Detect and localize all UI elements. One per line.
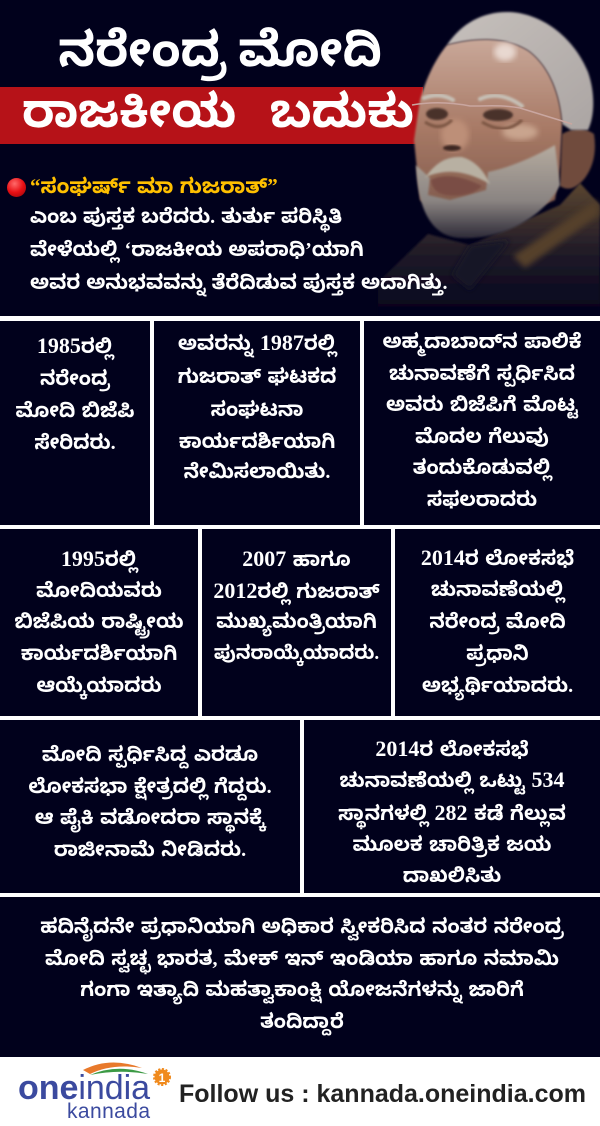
panel: won both constituencies: ರಾಜೀನಾಮೆ ನೀಡಿದರು. xyxy=(54,839,246,861)
icon: red bullet xyxy=(7,178,26,197)
panel: 1985 joined BJP: ಸೇರಿದರು. xyxy=(34,432,116,454)
footer xyxy=(0,1057,600,1126)
panel: Ahmedabad municipal election: ಮೊದಲ ಗೆಲುವು xyxy=(415,426,549,448)
panel: 1995 national secretary: ಆಯ್ಕೆಯಾದರು xyxy=(36,675,162,697)
panel: won both constituencies: ಲೋಕಸಭಾ ಕ್ಷೇತ್ರದಲ್ಲಿ ಗೆದ್ದರು. xyxy=(28,776,272,798)
panel: 1987 organisation secretary: ಅವರನ್ನು 1987ರಲ್ಲಿ xyxy=(178,330,336,355)
panel: 282 of 534 seats: ಚುನಾವಣೆಯಲ್ಲಿ ಒಟ್ಟು 534 xyxy=(340,767,564,792)
oneindia kannada logo: oneindia xyxy=(18,1069,150,1107)
panel: 282 of 534 seats: ದಾಖಲಿಸಿತು xyxy=(403,865,501,887)
oneindia kannada logo xyxy=(18,1062,171,1123)
panel: 1985 joined BJP: ಮೋದಿ ಬಿಜೆಪಿ xyxy=(16,400,134,422)
panel: Ahmedabad municipal election: ತಂದುಕೊಡುವಲ್ಲಿ xyxy=(413,457,551,479)
glasses xyxy=(412,103,572,124)
panel: 1995 national secretary xyxy=(0,529,198,716)
panel: 1987 organisation secretary: ಸಂಘಟನಾ xyxy=(211,399,303,421)
panel: 1985 joined BJP: ನರೇಂದ್ರ xyxy=(40,368,110,390)
eyes xyxy=(426,108,448,120)
highlighted book title: “ಸಂಘರ್ಷ್ ಮಾ ಗುಜರಾತ್” xyxy=(30,174,278,198)
oneindia kannada logo: kannada xyxy=(67,1100,150,1123)
face xyxy=(414,40,562,236)
follow us text: Follow us : kannada.oneindia.com xyxy=(179,1080,586,1108)
panel: 1985 joined BJP: 1985ರಲ್ಲಿ xyxy=(37,333,113,358)
panel: 1987 organisation secretary: ನೇಮಿಸಲಾಯಿತು. xyxy=(184,461,330,483)
panel: Ahmedabad municipal election: ಸಫಲರಾದರು xyxy=(427,489,537,511)
lips xyxy=(431,176,482,196)
panel: 2014 PM candidate: ಪ್ರಧಾನಿ xyxy=(466,643,529,665)
intro text: ಎಂಬ ಪುಸ್ತಕ ಬರೆದರು. ತುರ್ತು ಪರಿಸ್ಥಿತಿ xyxy=(30,206,342,228)
intro text xyxy=(30,206,448,296)
portrait photo illustration xyxy=(378,10,600,306)
intro text: ಅವರ ಅನುಭವವನ್ನು ತೆರೆದಿಡುವ ಪುಸ್ತಕ ಅದಾಗಿತ್ತು. xyxy=(30,272,448,294)
panel: 2007 and 2012 chief minister xyxy=(202,529,391,716)
panel: 2007 and 2012 chief minister: ಪುನರಾಯ್ಕೆಯಾದರು. xyxy=(214,643,379,664)
panel: 2014 PM candidate: ನರೇಂದ್ರ ಮೋದಿ xyxy=(429,611,566,633)
panel: 1995 national secretary: ಕಾರ್ಯದರ್ಶಿಯಾಗಿ xyxy=(21,643,177,665)
eyebrows xyxy=(424,95,522,106)
red title band: ರಾಜಕೀಯ ಬದುಕು xyxy=(22,86,414,138)
panel: 282 of 534 seats: ಸ್ಥಾನಗಳಲ್ಲಿ 282 ಕಡೆ ಗೆಲ್ಲುವ xyxy=(338,800,566,825)
panel: won both constituencies: ಮೋದಿ ಸ್ಪರ್ಧಿಸಿದ್ದ ಎರಡೂ xyxy=(42,744,258,766)
panel: 1985 joined BJP xyxy=(0,321,150,525)
nose xyxy=(441,119,469,151)
beard xyxy=(416,145,560,238)
ear xyxy=(560,129,595,189)
panel: 282 of 534 seats: ಮೂಲಕ ಚಾರಿತ್ರಿಕ ಜಯ xyxy=(353,834,551,856)
shawl and shoulders xyxy=(378,183,600,316)
panel: schemes as prime minister: ಗಂಗಾ ಇತ್ಯಾದಿ ಮಹತ್ವಾಕಾಂಕ್ಷಿ ಯೋಜನೆಗಳನ್ನು ಜಾರಿಗೆ xyxy=(80,979,524,1001)
oneindia kannada logo: 1 xyxy=(159,1071,166,1085)
panel: won both constituencies: ಆ ಪೈಕಿ ವಡೋದರಾ ಸ್ಥಾನಕ್ಕೆ xyxy=(35,807,265,829)
panel: Ahmedabad municipal election: ಅವರು ಬಿಜೆಪಿಗೆ ಮೊಟ್ಟ xyxy=(386,394,578,416)
panel: 2007 and 2012 chief minister: ಮುಖ್ಯಮಂತ್ರಿಯಾಗಿ xyxy=(216,611,377,633)
panel: 2014 PM candidate xyxy=(395,529,600,716)
panel: 2014 PM candidate: ಅಭ್ಯರ್ಥಿಯಾದರು. xyxy=(422,675,573,697)
panel: 1987 organisation secretary: ಕಾರ್ಯದರ್ಶಿಯಾಗಿ xyxy=(179,431,335,453)
panel: 2007 and 2012 chief minister: 2012ರಲ್ಲಿ ಗುಜರಾತ್ xyxy=(213,578,380,603)
panel: schemes as prime minister: ಹದಿನೈದನೇ ಪ್ರಧಾನಿಯಾಗಿ ಅಧಿಕಾರ ಸ್ವೀಕರಿಸಿದ ನಂತರ ನರೇಂದ್ರ xyxy=(40,916,564,938)
panel: schemes as prime minister: ತಂದಿದ್ದಾರೆ xyxy=(260,1011,344,1033)
panel: 2014 PM candidate: ಚುನಾವಣೆಯಲ್ಲಿ xyxy=(431,579,564,601)
panel: 1987 organisation secretary: ಗುಜರಾತ್ ಘಟಕದ xyxy=(178,366,336,388)
panel: 2014 PM candidate: 2014ರ ಲೋಕಸಭೆ xyxy=(421,545,574,570)
panel: 2007 and 2012 chief minister: 2007 ಹಾಗೂ xyxy=(242,546,351,571)
panel: header xyxy=(0,0,600,316)
panel: Ahmedabad municipal election xyxy=(364,321,600,525)
title: ನರೇಂದ್ರ ಮೋದಿ xyxy=(58,24,382,77)
hair xyxy=(447,12,593,130)
panel: schemes as prime minister: ಮೋದಿ ಸ್ವಚ್ಛ ಭಾರತ, ಮೇಕ್ ಇನ್ ಇಂಡಿಯಾ ಹಾಗೂ ನಮಾಮಿ xyxy=(45,948,559,970)
panel: 1995 national secretary: ಬಿಜೆಪಿಯ ರಾಷ್ಟ್ರೀಯ xyxy=(14,611,184,633)
panel: 1995 national secretary: 1995ರಲ್ಲಿ xyxy=(61,546,137,571)
intro text: ವೇಳೆಯಲ್ಲಿ ‘ರಾಜಕೀಯ ಅಪರಾಧಿ’ಯಾಗಿ xyxy=(30,239,364,261)
panel: 1987 organisation secretary xyxy=(154,321,360,525)
panel: Ahmedabad municipal election: ಅಹ್ಮದಾಬಾದ್‌ನ ಪಾಲಿಕೆ xyxy=(382,331,582,353)
panel: won both constituencies xyxy=(0,720,300,893)
panel: 1995 national secretary: ಮೋದಿಯವರು xyxy=(36,580,162,602)
panel: 282 of 534 seats xyxy=(304,720,600,893)
panel: schemes as prime minister xyxy=(0,897,600,1057)
panel: Ahmedabad municipal election: ಚುನಾವಣೆಗೆ ಸ್ಪರ್ಧಿಸಿದ xyxy=(389,363,575,385)
moustache xyxy=(425,157,490,184)
panel: 282 of 534 seats: 2014ರ ಲೋಕಸಭೆ xyxy=(375,736,529,761)
